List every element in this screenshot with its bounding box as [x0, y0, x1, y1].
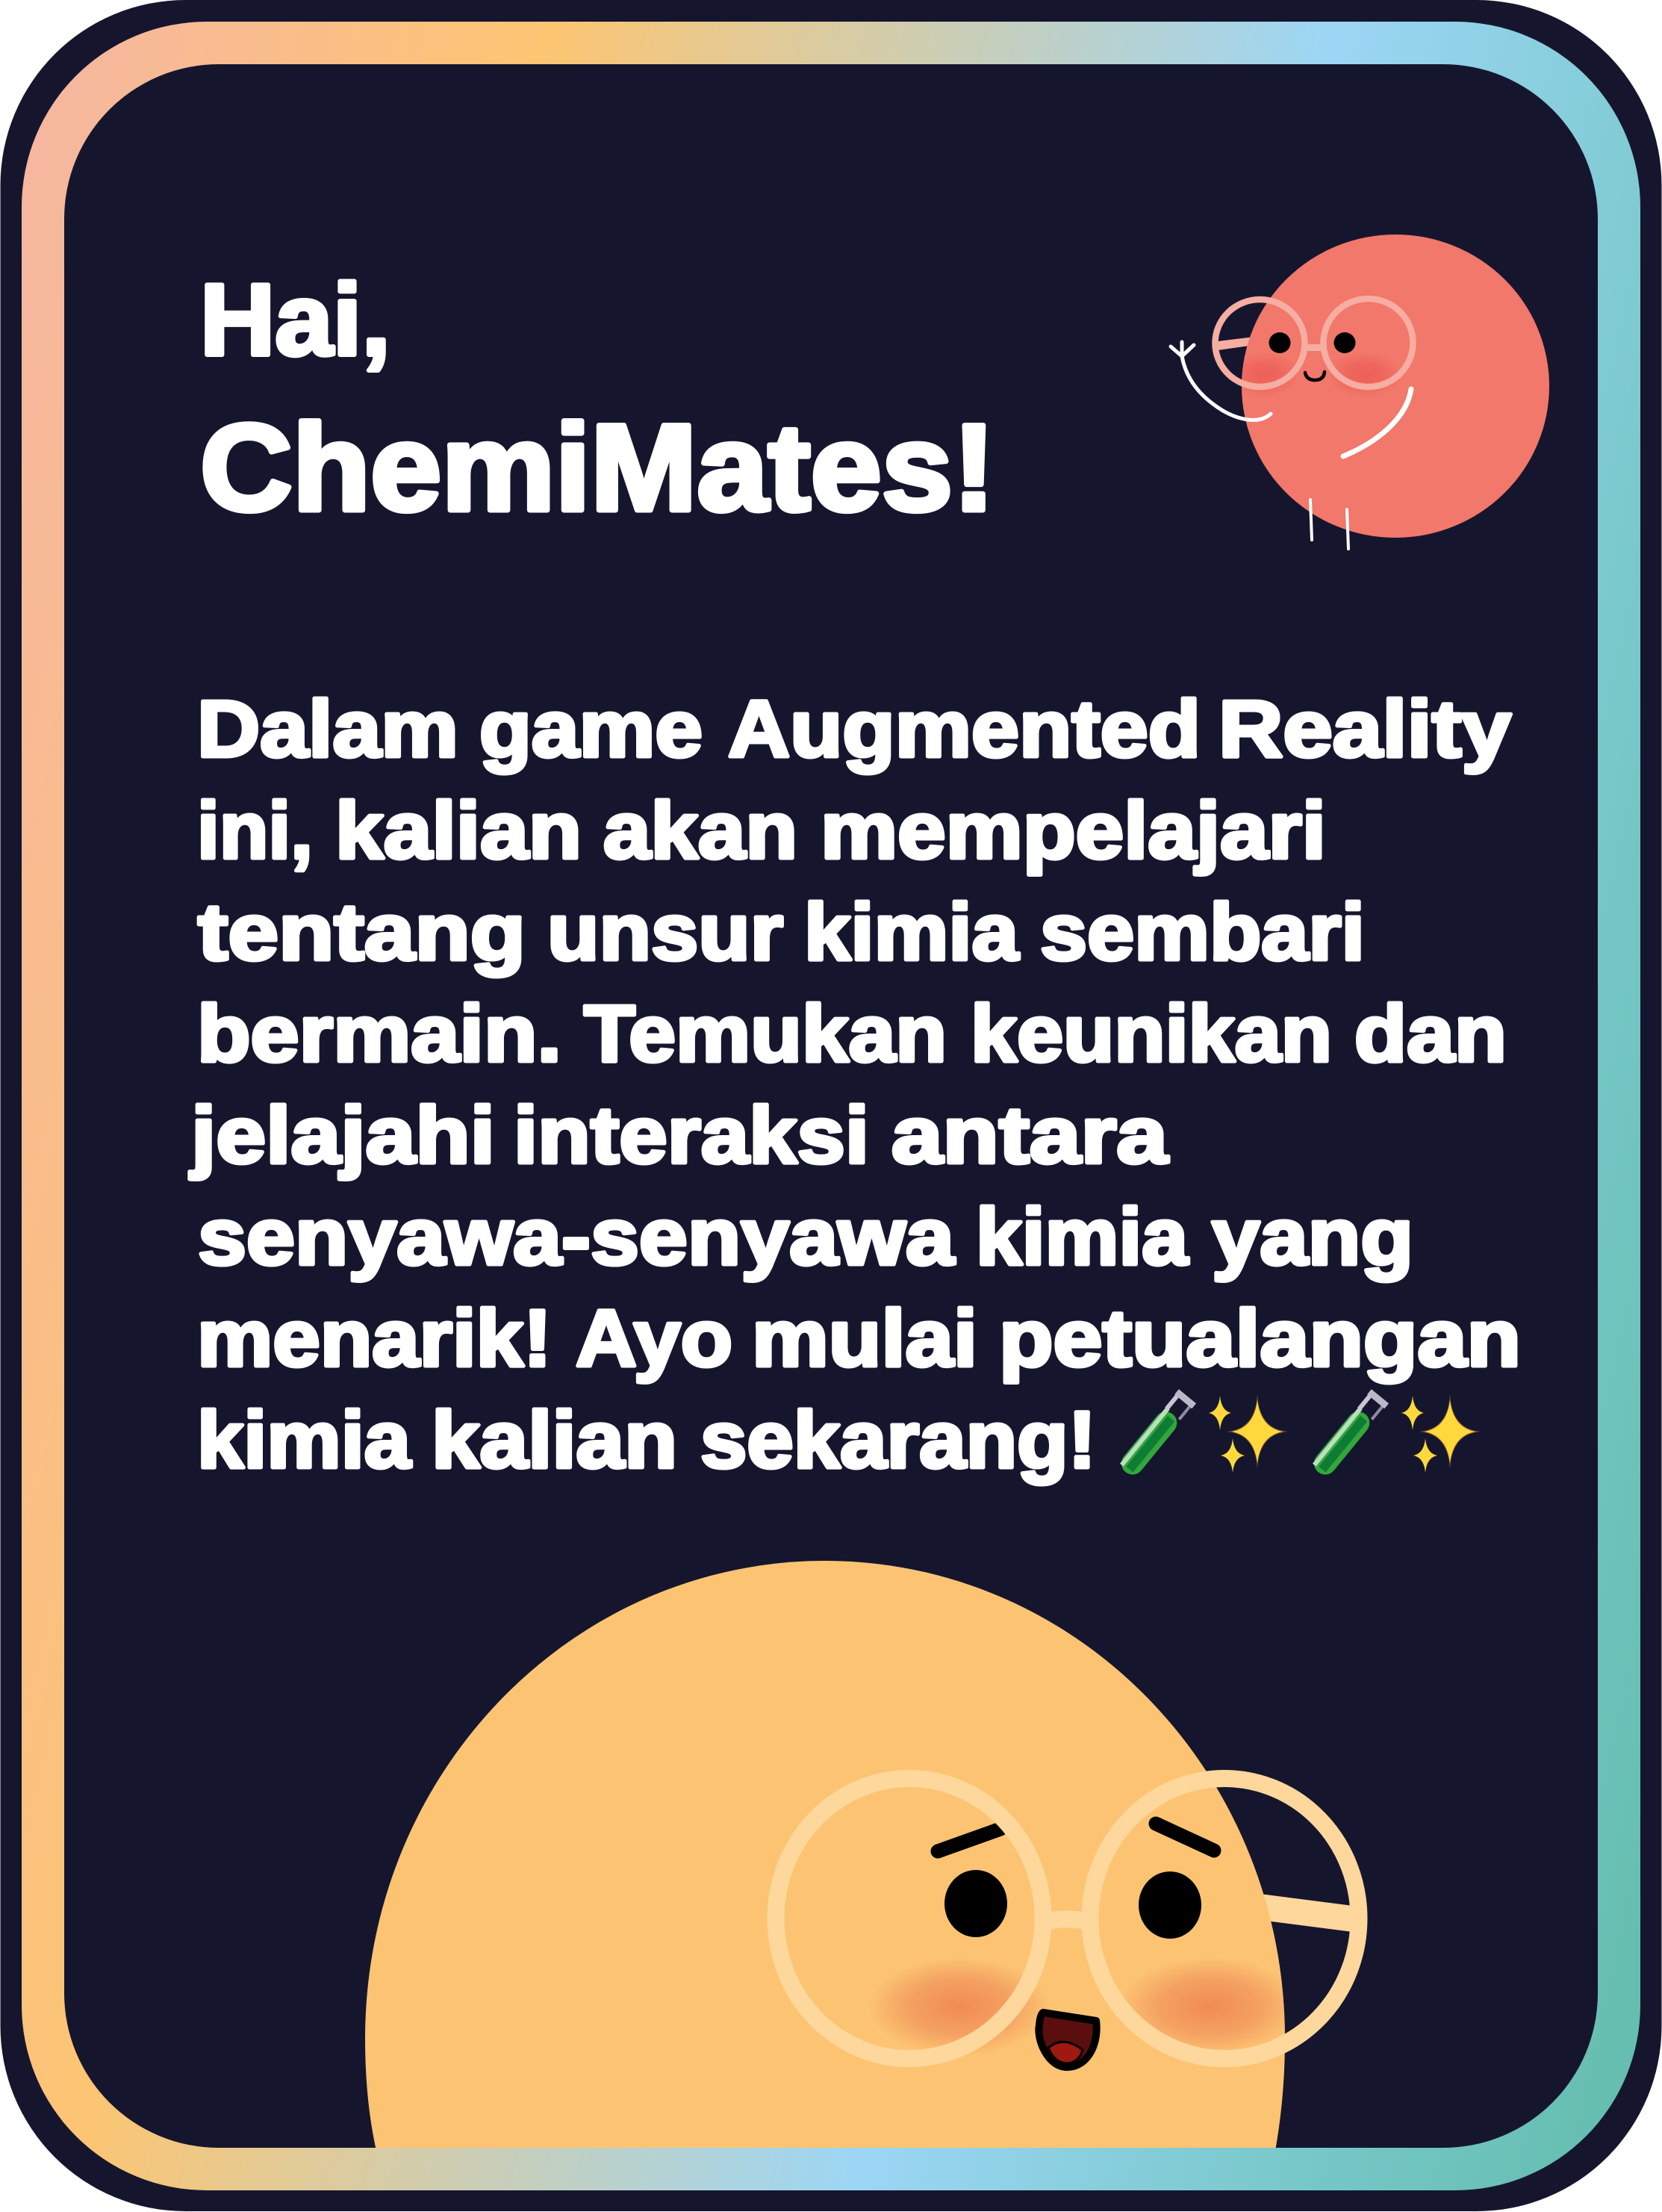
- tongue: [1048, 2042, 1083, 2063]
- line 7: Ayo: [576, 1293, 732, 1383]
- line 7: mulai: [752, 1293, 977, 1383]
- line 5: jelajahi: [190, 1090, 495, 1180]
- line 4: bermain.: [197, 988, 561, 1078]
- mascot: large orange character: [365, 1561, 1359, 2151]
- line 7: petualangan: [999, 1293, 1521, 1383]
- line 2: kalian: [335, 785, 582, 875]
- icon: test tube 1: [1117, 1389, 1196, 1479]
- line 6: senyawa-senyawa: [198, 1191, 955, 1281]
- eyebrows: [938, 1824, 1214, 1851]
- body text: [190, 683, 1521, 1485]
- line 2: ini,: [197, 785, 313, 875]
- cheeks: [1242, 358, 1393, 392]
- temple arm: [1263, 1894, 1350, 1931]
- line 4: Temukan: [584, 988, 947, 1078]
- heading: ChemiMates: ChemiMates!: [200, 399, 995, 536]
- body: [1242, 234, 1549, 538]
- line 5: interaksi: [514, 1090, 869, 1180]
- line 7: [197, 1293, 1521, 1383]
- icon: sparkles 2: [1401, 1394, 1481, 1473]
- line 1: Reality: [1219, 683, 1511, 774]
- icon: sparkles 1: [1209, 1394, 1288, 1473]
- line 2: [197, 785, 1326, 875]
- line 3: sembari: [1040, 886, 1365, 977]
- eyes: [1269, 332, 1356, 353]
- glasses: [1216, 299, 1413, 387]
- line 7: menarik!: [197, 1293, 552, 1383]
- smile: [1305, 372, 1325, 380]
- line 6: kimia: [976, 1191, 1189, 1281]
- body: [365, 1561, 1285, 2151]
- line 6: [198, 1191, 1413, 1281]
- mouth: [1039, 2013, 1097, 2067]
- line 1: Augmented: [728, 683, 1201, 774]
- glasses: [776, 1779, 1359, 2058]
- cheeks: [878, 1963, 1285, 2050]
- mascot: small coral character: [1171, 234, 1549, 549]
- line 5: antara: [891, 1090, 1168, 1180]
- line 4: dan: [1354, 988, 1507, 1078]
- heading: Hai: Hai,: [200, 263, 390, 376]
- line 8: kimia: [197, 1394, 411, 1485]
- line 4: keunikan: [971, 988, 1332, 1078]
- line 3: [198, 886, 1365, 977]
- line 8: sekarang!: [700, 1394, 1096, 1485]
- line 6: yang: [1212, 1191, 1413, 1281]
- legs: [1310, 500, 1348, 549]
- line 2: mempelajari: [821, 785, 1326, 875]
- line 5: [190, 1090, 1168, 1180]
- line 1: game: [479, 683, 703, 774]
- line 4: [197, 988, 1507, 1078]
- waving arm: [1171, 342, 1271, 420]
- line 3: unsur: [547, 886, 783, 977]
- line 3: tentang: [198, 886, 526, 977]
- icon: test tube 2: [1310, 1389, 1389, 1479]
- line 3: kimia: [804, 886, 1019, 977]
- temple arm: [1218, 337, 1254, 350]
- line 8: kalian: [432, 1394, 677, 1485]
- line 2: akan: [603, 785, 797, 875]
- eyes: [944, 1870, 1201, 1939]
- right arm: [1343, 389, 1411, 456]
- line 8: [197, 1394, 1096, 1485]
- line 1: [197, 683, 1511, 774]
- line 1: Dalam: [197, 683, 458, 774]
